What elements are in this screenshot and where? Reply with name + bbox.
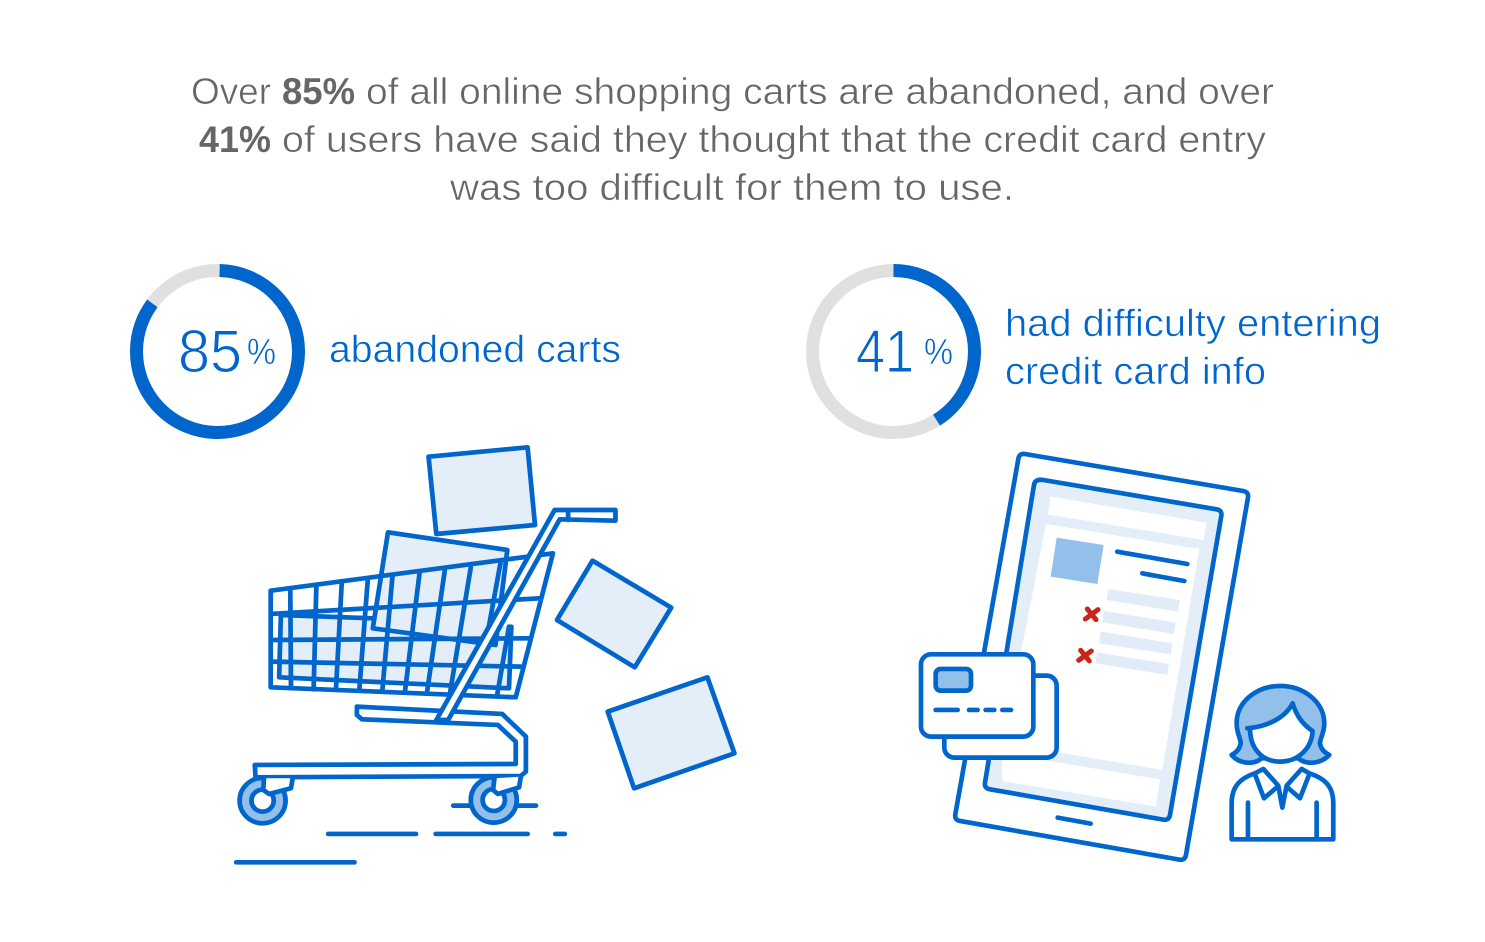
stat: 85%: 85 [178, 318, 242, 385]
tablet home button [1058, 818, 1091, 824]
label: had difficulty entering credit card info [1005, 303, 1381, 393]
icon: error marks [1079, 609, 1098, 661]
icon: box right [557, 561, 671, 667]
panel: 41% credit card stat [812, 270, 1381, 432]
donut chart: 85% [134, 268, 301, 435]
illustration: shopping cart with falling boxes [236, 447, 734, 862]
icon: box top [429, 447, 535, 534]
label: had difficulty entering credit card info: credit card info [1005, 351, 1266, 393]
label: abandoned carts: abandoned carts [329, 329, 621, 371]
wheel right [471, 777, 521, 823]
title: Over [191, 71, 271, 112]
icon: box lower right [608, 677, 734, 788]
screen header [1048, 497, 1207, 540]
label: had difficulty entering credit card info: had difficulty entering [1005, 303, 1381, 345]
cart handle [436, 510, 615, 720]
icon: credit cards [921, 654, 1057, 758]
stat: 41% [856, 318, 953, 385]
title: of all online shopping carts are abandoned, and over [366, 71, 1274, 112]
icon: box in cart [373, 532, 507, 645]
motion lines [236, 806, 565, 862]
wheel left [240, 778, 293, 823]
title: was too difficult for them to use. [449, 167, 1014, 208]
stat: 41%: 41 [856, 318, 914, 385]
panel: 85% abandoned carts stat [134, 268, 621, 435]
illustration: tablet, credit card and person [921, 454, 1333, 860]
stat: 41%: % [924, 331, 953, 372]
stat: 85%: % [247, 331, 276, 372]
tablet screen [985, 480, 1221, 820]
product text lines [1117, 552, 1187, 581]
stat: 85% [178, 318, 276, 385]
cart basket back [279, 617, 511, 688]
tablet body [955, 454, 1248, 860]
title [191, 71, 1274, 208]
form fields [1096, 589, 1180, 675]
screen footer [1002, 753, 1160, 807]
product image [1051, 538, 1104, 584]
cart basket wires [271, 553, 553, 697]
title: 85% [282, 71, 355, 112]
title: of users have said they thought that the credit card entry [282, 119, 1267, 160]
cart base frame [255, 707, 526, 777]
donut chart: 41% [812, 270, 974, 432]
title: 41% [199, 119, 271, 160]
screen content [1003, 524, 1199, 770]
icon: person [1232, 686, 1333, 839]
